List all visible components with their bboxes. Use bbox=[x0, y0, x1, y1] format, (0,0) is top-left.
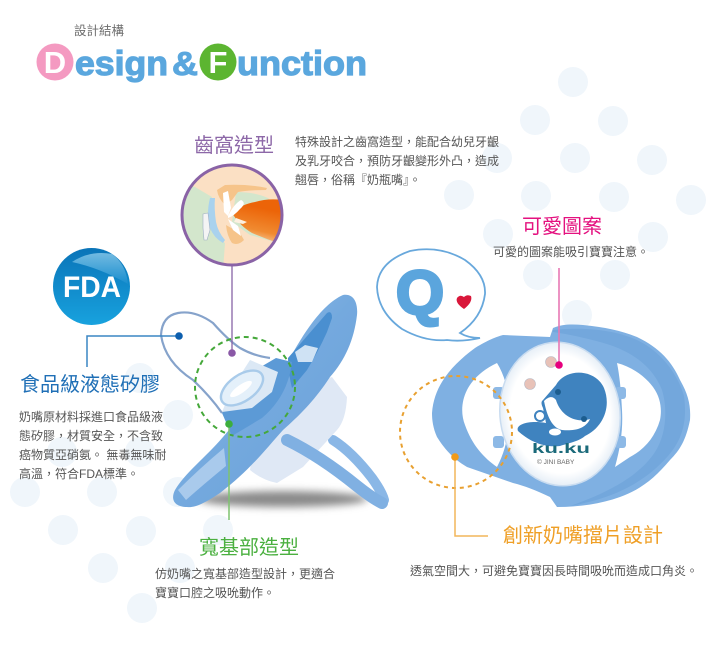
whale bbox=[518, 373, 607, 446]
text: wide base description: 仿奶嘴之寬基部造型設計，更適合 bbox=[155, 566, 335, 581]
title: Design & Function: F bbox=[209, 45, 227, 80]
callout line: tooth socket bbox=[228, 265, 236, 357]
text: silicone description: 奶嘴原材料採進口食品級液 bbox=[19, 409, 163, 424]
text: tooth socket description: 特殊設計之齒窩造型，能配合幼兒牙齦 bbox=[295, 134, 499, 149]
text: tooth socket description: 及乳牙咬合，預防牙齦變形外凸，造成 bbox=[295, 153, 499, 168]
icon: heart bbox=[457, 295, 471, 309]
title: Design & Function: unction bbox=[237, 45, 367, 83]
nipple inner bbox=[215, 364, 269, 412]
near handle bbox=[287, 440, 382, 503]
heading: cute pattern: 可愛圖案 bbox=[522, 215, 602, 238]
text: silicone description: 癌物質亞硝氨。 無毒無味耐 bbox=[19, 447, 166, 462]
icon: FDA badge: FDA bbox=[63, 271, 121, 304]
title: Design & Function: esign bbox=[75, 45, 168, 83]
icon: FDA badge bbox=[53, 248, 130, 325]
heading: food grade silicone: 食品級液態矽膠 bbox=[20, 373, 160, 396]
text: tooth socket description: 翹唇，俗稱『奶瓶嘴』。 bbox=[295, 173, 421, 187]
nipple neck bbox=[222, 358, 292, 436]
callout line: FDA silicone bbox=[87, 332, 183, 367]
text: silicone description: 高溫，符合FDA標準。 bbox=[19, 466, 139, 481]
callout line: shield design bbox=[451, 453, 488, 536]
shield bbox=[432, 324, 690, 507]
callout line: cute pattern bbox=[555, 268, 563, 369]
text: tooth socket description bbox=[295, 134, 499, 187]
shield opening bbox=[288, 312, 332, 388]
speech bubble with Q bbox=[377, 249, 485, 341]
title: Design & Function bbox=[36, 44, 367, 83]
title: Design & Function: & bbox=[172, 45, 198, 82]
copyright text: © JINI BABY bbox=[537, 458, 575, 466]
white base bbox=[250, 377, 347, 483]
shield ring bbox=[173, 295, 357, 507]
white center disc bbox=[491, 334, 629, 494]
heading: wide base: 寬基部造型 bbox=[199, 536, 299, 559]
letter Q: Q bbox=[396, 259, 444, 328]
text: wide base description: 寶寶口腔之吸吮動作。 bbox=[155, 585, 275, 600]
far handle bbox=[333, 440, 384, 500]
heading: tooth socket shape: 齒窩造型 bbox=[194, 134, 274, 157]
side tabs bbox=[493, 387, 626, 448]
subtitle: 設計結構 bbox=[74, 23, 125, 38]
text: silicone description: 態矽膠，材質安全，不含致 bbox=[19, 428, 163, 443]
ku.ku logo: ku.ku bbox=[532, 440, 590, 456]
dashed circle: orange bbox=[400, 376, 512, 488]
text: cute pattern description: 可愛的圖案能吸引寶寶注意。 bbox=[493, 244, 649, 259]
callout line: wide base bbox=[225, 420, 233, 520]
text: shield description: 透氣空間大，可避免寶寶因長時間吸吮而造成口角炎。 bbox=[410, 563, 698, 578]
icon: mouth cross-section circle bbox=[175, 165, 285, 270]
text: silicone description bbox=[19, 409, 166, 481]
left pacifier bbox=[161, 295, 384, 507]
dashed circle: green bbox=[195, 337, 295, 437]
pacifier shadow bbox=[198, 491, 368, 507]
right pacifier bbox=[432, 324, 690, 507]
nipple transparent outline bbox=[161, 312, 270, 413]
heading: innovative shield: 創新奶嘴擋片設計 bbox=[503, 524, 663, 547]
balloons bbox=[524, 356, 556, 390]
text: wide base description bbox=[155, 566, 335, 600]
title: Design & Function: D bbox=[44, 45, 66, 80]
